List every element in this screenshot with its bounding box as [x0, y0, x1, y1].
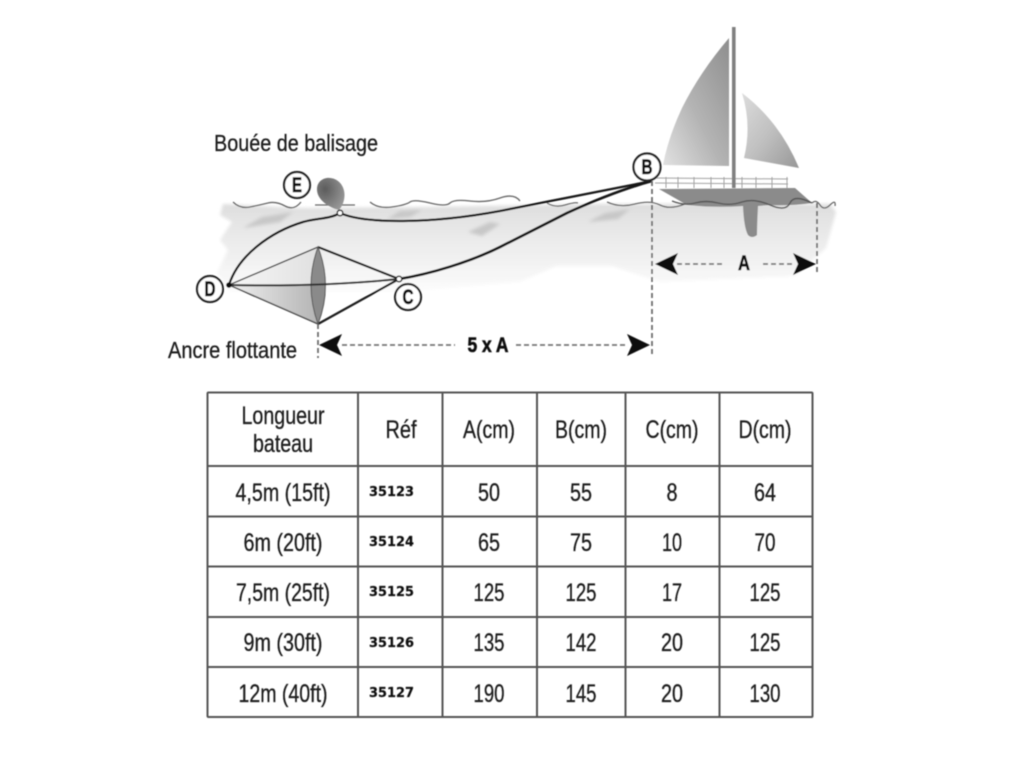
row 9m: 142 — [566, 629, 596, 657]
row 4,5m: 8 — [666, 479, 678, 507]
ropes — [229, 181, 652, 285]
cone — [229, 247, 318, 285]
marker B: B — [642, 156, 652, 179]
table header: D(cm) — [738, 416, 792, 444]
row 6m: 10 — [662, 529, 682, 557]
main sail — [663, 38, 729, 166]
size table — [207, 392, 813, 717]
marker C — [395, 284, 421, 310]
row 4,5m — [236, 479, 776, 507]
table header: C(cm) — [646, 416, 698, 444]
row 6m: 65 — [478, 529, 500, 557]
marker E: E — [292, 174, 302, 197]
row 12m: 12m (40ft) — [238, 680, 328, 708]
row 6m: 6m (20ft) — [244, 529, 322, 557]
table grid — [207, 392, 813, 717]
marker B — [634, 154, 660, 180]
row 6m: 35124 — [369, 535, 414, 550]
waterline — [672, 198, 812, 208]
anchor label: Ancre flottante — [168, 337, 297, 363]
row 4,5m: 35123 — [369, 485, 414, 500]
row 12m: 20 — [661, 680, 683, 708]
dimension 5 x A — [319, 334, 650, 357]
row 9m: 9m (30ft) — [244, 629, 322, 657]
marker E — [284, 172, 310, 198]
row 4,5m: 50 — [478, 479, 500, 507]
anchor point D — [226, 282, 232, 288]
row 12m — [238, 680, 780, 708]
water background — [217, 204, 836, 292]
marker C: C — [402, 286, 414, 309]
row 7,5m: 35125 — [369, 585, 414, 600]
row 12m: 35127 — [369, 686, 414, 701]
row 4,5m: 64 — [754, 479, 776, 507]
row 12m: 190 — [474, 680, 504, 708]
row 7,5m: 125 — [750, 579, 780, 607]
buoy label: Bouée de balisage — [214, 130, 378, 156]
dimension 5 x A: 5 x A — [468, 334, 508, 357]
table header: bateau — [253, 430, 313, 458]
anchoring diagram — [168, 27, 836, 363]
row 4,5m: 55 — [570, 479, 592, 507]
row 6m: 70 — [754, 529, 776, 557]
table header: B(cm) — [555, 416, 607, 444]
row 6m — [244, 529, 776, 557]
sea anchor — [229, 247, 399, 324]
row 4,5m: 4,5m (15ft) — [236, 479, 330, 507]
marker D — [197, 276, 223, 302]
row 7,5m: 7,5m (25ft) — [236, 579, 330, 607]
hull — [659, 188, 812, 237]
row 7,5m: 17 — [662, 579, 682, 607]
row 9m: 135 — [474, 629, 504, 657]
jib sail — [742, 93, 799, 168]
mast — [732, 27, 736, 188]
row 9m: 125 — [750, 629, 780, 657]
dimension A — [318, 181, 817, 358]
railing — [655, 177, 788, 188]
dimension A: A — [738, 252, 750, 275]
sailboat — [655, 27, 812, 237]
row 12m: 145 — [566, 680, 596, 708]
row 7,5m: 125 — [566, 579, 596, 607]
row 9m: 35126 — [369, 636, 414, 651]
water patches — [243, 209, 630, 236]
table header: Longueur — [242, 402, 324, 430]
row 6m: 75 — [570, 529, 592, 557]
waves — [233, 196, 835, 208]
row 9m: 20 — [661, 629, 683, 657]
buoy — [317, 178, 344, 210]
rope rings — [337, 210, 402, 282]
row 7,5m: 125 — [474, 579, 504, 607]
row 9m — [244, 629, 780, 657]
row 7,5m — [236, 579, 780, 607]
table header: A(cm) — [463, 416, 515, 444]
row 12m: 130 — [750, 680, 780, 708]
table header — [242, 402, 792, 458]
table header: Réf — [386, 416, 417, 444]
lens — [311, 247, 326, 324]
marker D: D — [204, 278, 216, 301]
